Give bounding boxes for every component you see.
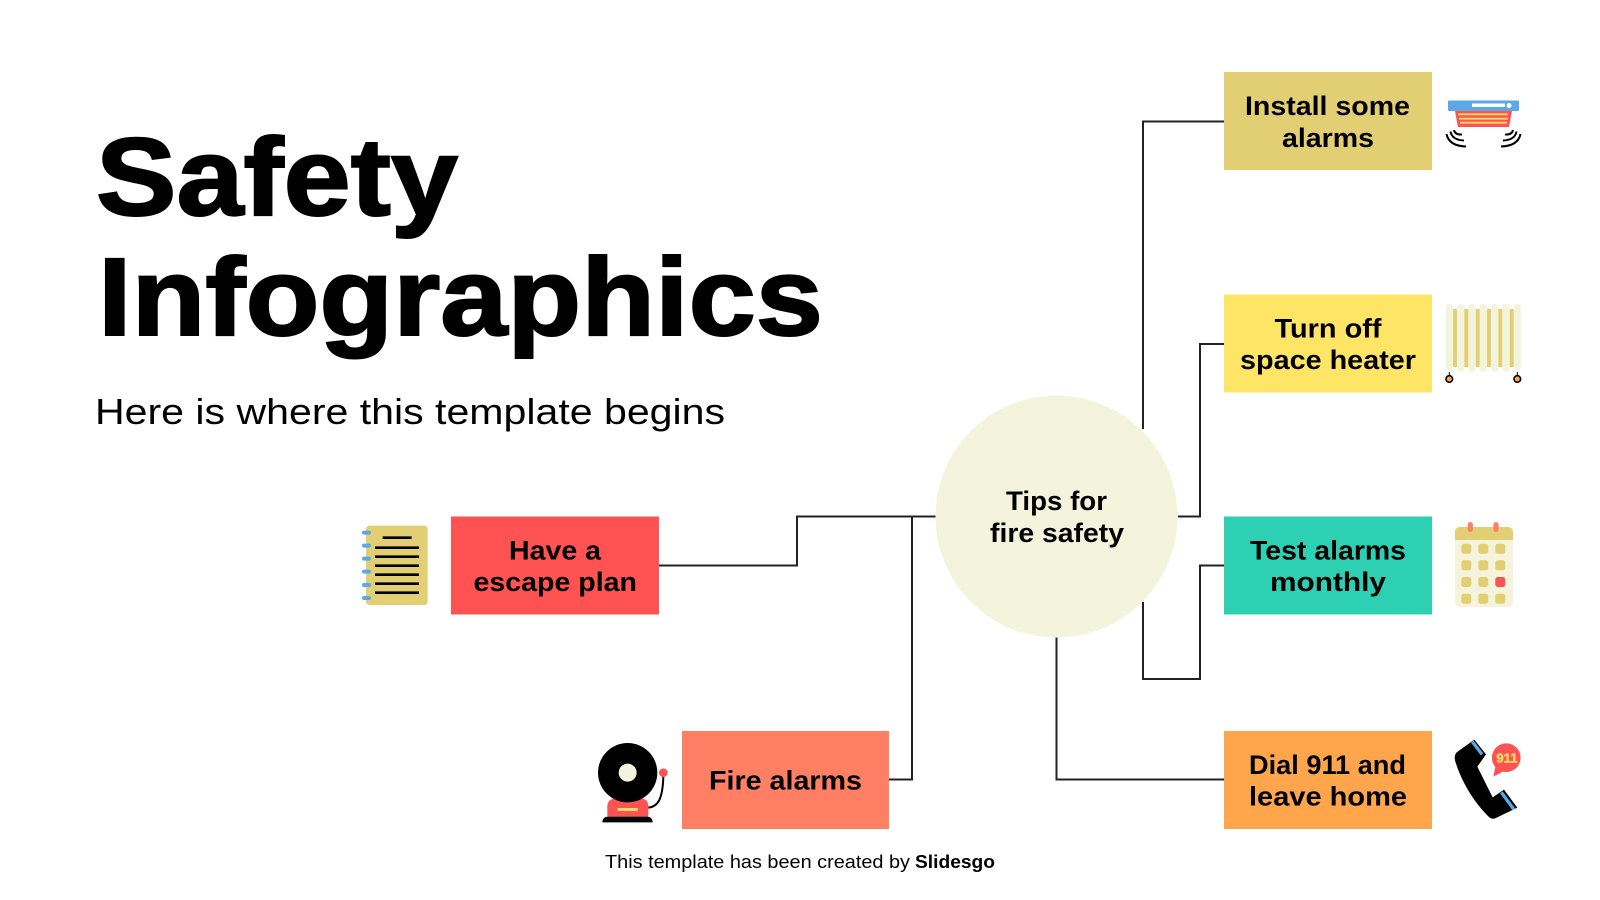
box: test alarms monthly: monthly — [1270, 567, 1386, 597]
box: dial 911 and leave home: Dial 911 and — [1249, 750, 1406, 780]
box: test alarms monthly — [1224, 516, 1432, 614]
subtitle: Here is where this template begins — [95, 391, 725, 432]
title: Infographics — [98, 236, 823, 359]
central circle: tips for fire safety: Tips for — [1006, 486, 1107, 516]
icon: fire alarm bell — [598, 743, 668, 822]
box: install some alarms: Install some — [1245, 91, 1410, 121]
icon: telephone with 911 bubble: 911 — [1496, 751, 1518, 766]
icon: radiator — [1446, 304, 1521, 382]
icon: notebook — [364, 526, 428, 605]
box: turn off space heater: space heater — [1240, 345, 1417, 375]
central circle: tips for fire safety — [936, 396, 1178, 638]
box: dial 911 and leave home: leave home — [1249, 782, 1407, 812]
box: have a escape plan: Have a — [509, 536, 602, 566]
box: fire alarms — [682, 731, 889, 829]
box: install some alarms — [1224, 72, 1432, 170]
box: test alarms monthly: Test alarms — [1250, 536, 1406, 566]
connector lines — [659, 122, 1224, 780]
central circle: tips for fire safety: fire safety — [990, 518, 1124, 548]
title — [96, 116, 823, 359]
icon: telephone with 911 bubble — [1455, 740, 1521, 819]
box: turn off space heater: Turn off — [1274, 314, 1383, 344]
footer credit: Slidesgo — [915, 852, 995, 872]
box: turn off space heater — [1224, 294, 1432, 392]
footer credit: This template has been created by — [605, 852, 910, 872]
box: fire alarms: Fire alarms — [709, 766, 862, 796]
box: dial 911 and leave home — [1224, 731, 1432, 829]
box: install some alarms: alarms — [1282, 123, 1374, 153]
box: have a escape plan — [451, 516, 659, 614]
icon: smoke alarm — [1446, 100, 1520, 146]
box: have a escape plan: escape plan — [474, 567, 637, 597]
title: Safety — [96, 116, 458, 239]
icon: calendar — [1455, 522, 1513, 607]
